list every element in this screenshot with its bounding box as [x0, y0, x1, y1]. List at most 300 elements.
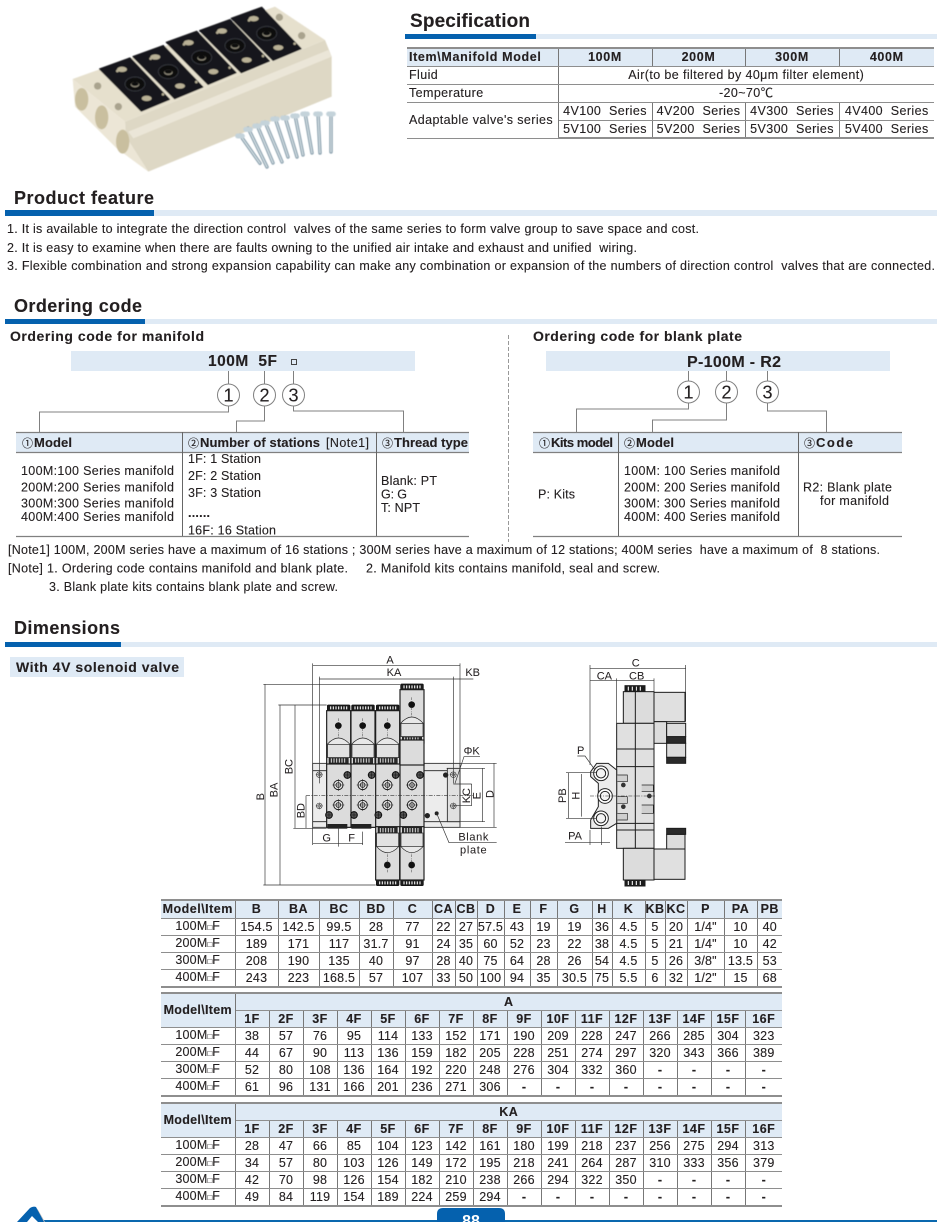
- table: dimensions by item: B: [252, 902, 261, 916]
- table: dimension KA by stations: 275: [683, 1138, 705, 1152]
- dimension lines: [263, 663, 497, 885]
- table: dimensions by item: 3/8": [694, 954, 717, 968]
- table: dimensions by item: 5: [651, 954, 659, 968]
- table: dimensions by item: 100: [480, 971, 501, 985]
- heading: Specification: [405, 11, 937, 39]
- table: blank plate code legend: Model: [636, 435, 674, 450]
- table: dimensions by item: 1/4": [694, 920, 717, 934]
- table: blank plate code legend: [533, 432, 902, 536]
- heading: Specification: Specification: [410, 11, 530, 32]
- table: dimension A by stations: 3F: [312, 1012, 328, 1026]
- table: dimension A by stations: 266: [649, 1028, 671, 1042]
- table: dimensions by item: G: [569, 902, 580, 916]
- table: blank plate code legend: 100M: 100 Series manifold: [624, 464, 780, 478]
- table: dimensions by item: 142.5: [282, 920, 315, 934]
- dimension labels: Blank: [458, 832, 489, 844]
- table: dimensions by item: C: [408, 902, 417, 916]
- table: dimension A by stations: 5F: [380, 1012, 396, 1026]
- table: dimension KA by stations: 28: [245, 1138, 259, 1152]
- table: dimension A by stations: 228: [581, 1028, 603, 1042]
- table: dimension A by stations: 271: [445, 1080, 467, 1094]
- table: dimensions by item: 15: [733, 971, 748, 985]
- table: dimension A by stations: 205: [479, 1046, 501, 1060]
- table: specification: 100M: [588, 50, 622, 64]
- table: dimension KA by stations: 5F: [380, 1122, 396, 1136]
- table: dimension A by stations: 182: [445, 1046, 467, 1060]
- table: dimension KA by stations: 84: [279, 1190, 293, 1204]
- text block: product features: 2. It is easy to examine when there are faults owning to the unified air intake and exhaust and unified wiring.: [7, 241, 637, 255]
- table: manifold code legend: [16, 432, 469, 538]
- table: dimension A by stations: 136: [343, 1062, 365, 1076]
- table: dimensions by item: 1/2": [694, 971, 717, 985]
- table: dimension A by stations: 366: [717, 1046, 739, 1060]
- table: specification: Adaptable valve's series: [409, 113, 553, 127]
- table: dimensions by item: 50: [459, 971, 473, 985]
- table: dimension KA by stations: -: [762, 1190, 766, 1204]
- table: specification: 5V100 Series: [563, 122, 647, 136]
- table: dimensions by item: 68: [763, 971, 777, 985]
- table: dimension KA by stations: 259: [445, 1190, 467, 1204]
- table: dimensions by item: 43: [510, 920, 524, 934]
- table: dimension KA by stations: 180: [513, 1138, 535, 1152]
- table: dimensions by item: 35: [536, 971, 551, 985]
- table: dimensions by item: H: [597, 902, 607, 916]
- table: dimension A by stations: 247: [615, 1028, 637, 1042]
- table: dimension KA by stations: 200M□F: [175, 1154, 220, 1168]
- table: dimension A by stations: 80: [279, 1062, 293, 1076]
- table: dimensions by item: 6: [651, 971, 659, 985]
- footer band with page number tab: [17, 1207, 937, 1222]
- table: dimension KA by stations: KA: [499, 1105, 518, 1119]
- table: dimensions by item: 5.5: [620, 971, 637, 985]
- table: dimension A by stations: -: [762, 1062, 766, 1076]
- table: dimension A by stations: 200M□F: [175, 1044, 220, 1058]
- table: dimension A by stations: 400M□F: [175, 1079, 220, 1093]
- heading: Product feature: [5, 188, 937, 216]
- table: dimensions by item: E: [513, 902, 521, 916]
- table: dimensions by item: 13.5: [728, 954, 753, 968]
- table: dimension KA by stations: 123: [411, 1138, 433, 1152]
- table: dimension KA by stations: 103: [343, 1156, 365, 1170]
- table: dimensions by item: F: [539, 902, 548, 916]
- dimension labels: PA: [568, 830, 583, 842]
- table: dimension A by stations: A: [504, 995, 514, 1009]
- table: dimensions by item: Model\Item: [163, 902, 233, 916]
- table: dimensions by item: 75: [483, 954, 498, 968]
- table: dimension KA by stations: 256: [649, 1138, 671, 1152]
- table: blank plate code legend: P: Kits: [538, 488, 575, 502]
- table: dimension KA by stations: 66: [313, 1138, 327, 1152]
- subheading: manifold: Ordering code for manifold: [10, 328, 204, 344]
- table: dimension A by stations: 360: [615, 1062, 637, 1076]
- dimension labels: C: [632, 658, 640, 670]
- table: dimension A by stations: 57: [279, 1028, 293, 1042]
- dimension lines: [565, 665, 686, 845]
- table: dimension A by stations: 7F: [448, 1012, 464, 1026]
- table: dimension KA by stations: 400M□F: [175, 1189, 220, 1203]
- table: dimensions by item: 24: [436, 936, 451, 950]
- table: blank plate code legend: 400M: 400 Series manifold: [624, 510, 780, 524]
- table: manifold code legend: Model: [34, 435, 72, 450]
- table: dimension A by stations: 171: [479, 1028, 501, 1042]
- table: dimension KA by stations: 15F: [716, 1122, 740, 1136]
- table: dimension A by stations: 131: [309, 1080, 331, 1094]
- table: dimension KA by stations: 294: [547, 1172, 569, 1186]
- table: dimension KA by stations: 149: [411, 1156, 433, 1170]
- table: manifold code legend: ②: [188, 437, 199, 450]
- table: dimension KA by stations: 172: [445, 1156, 467, 1170]
- table: dimension A by stations: 11F: [581, 1012, 603, 1026]
- table: dimension A by stations: 236: [411, 1080, 433, 1094]
- notes: [8, 543, 880, 594]
- dimension labels: ΦK: [464, 746, 480, 758]
- table: dimension A by stations: 251: [547, 1046, 569, 1060]
- divider between ordering panels: [508, 335, 510, 542]
- table: dimension A by stations: 300M□F: [175, 1062, 220, 1076]
- table: dimension KA by stations: 10F: [546, 1122, 570, 1136]
- table: dimensions by item: 75: [595, 971, 609, 985]
- table: dimension A by stations: 304: [717, 1028, 739, 1042]
- table: dimensions by item: KC: [666, 902, 686, 916]
- table: dimension A by stations: 332: [581, 1062, 603, 1076]
- table: specification: 4V300 Series: [750, 104, 834, 118]
- table: dimension A by stations: 304: [547, 1062, 569, 1076]
- table: dimension KA by stations: 85: [347, 1138, 361, 1152]
- notes: 3. Blank plate kits contains blank plate and screw.: [49, 580, 338, 594]
- table: manifold code legend: 200M:200 Series manifold: [21, 480, 174, 494]
- table: dimension A by stations: 6F: [414, 1012, 430, 1026]
- black gasket plates: [100, 7, 301, 111]
- table: manifold code legend: 16F: 16 Station: [188, 524, 276, 538]
- table: dimension KA by stations: -: [692, 1172, 696, 1186]
- table: dimension KA by stations: 238: [479, 1172, 501, 1186]
- table: dimension KA by stations: 199: [547, 1138, 569, 1152]
- code bar: 100M 5F: 100M 5F: [208, 353, 277, 370]
- dimension labels: KA: [387, 667, 402, 679]
- table: blank plate code legend: 200M: 200 Series manifold: [624, 480, 780, 494]
- table: dimensions by item: 32: [669, 971, 683, 985]
- table: dimension KA by stations: 294: [479, 1190, 501, 1204]
- table: specification: [407, 47, 934, 139]
- table: dimensions by item: 4.5: [620, 920, 637, 934]
- table: dimension KA by stations: 104: [377, 1138, 399, 1152]
- table: dimension KA by stations: 11F: [581, 1122, 603, 1136]
- table: dimensions by item: 40: [369, 954, 383, 968]
- table: dimension A by stations: 67: [279, 1046, 293, 1060]
- table: dimensions by item: 35: [459, 936, 473, 950]
- table: manifold code legend: 300M:300 Series manifold: [21, 496, 174, 510]
- text block: product features: 3. Flexible combination and strong expansion capability can make any combination or expansion of the numbers of direction control valves that are connected.: [7, 259, 935, 273]
- table: dimension A by stations: 10F: [546, 1012, 570, 1026]
- table: dimensions by item: CB: [456, 902, 476, 916]
- numbered callouts with connector lines: [576, 371, 826, 432]
- table: specification: 300M: [775, 50, 809, 64]
- table: dimensions by item: 223: [288, 971, 309, 985]
- dimension labels: [255, 654, 496, 856]
- table: dimensions by item: 100M□F: [175, 918, 220, 932]
- table: dimension KA by stations: 224: [411, 1190, 433, 1204]
- table: dimensions by item: 19: [536, 920, 551, 934]
- table: dimensions by item: 28: [436, 954, 451, 968]
- heading: Dimensions: Dimensions: [14, 618, 120, 638]
- table: dimension KA by stations: 16F: [752, 1122, 775, 1136]
- table: dimensions by item: 31.7: [363, 936, 389, 950]
- table: dimensions by item: 27: [459, 920, 473, 934]
- table: dimension A by stations: 209: [547, 1028, 569, 1042]
- table: dimension KA by stations: 356: [717, 1156, 739, 1170]
- table: dimension A by stations: 133: [411, 1028, 433, 1042]
- table: dimension KA by stations: 1F: [244, 1122, 260, 1136]
- table: dimension KA by stations: 210: [445, 1172, 467, 1186]
- table: dimensions by item: 22: [567, 936, 582, 950]
- table: dimension KA by stations: 98: [313, 1172, 327, 1186]
- table: dimensions by item: 200M□F: [175, 936, 220, 950]
- code bar: 100M 5F: [71, 351, 415, 371]
- product photo: manifold block with screws: [73, 7, 333, 172]
- table: blank plate code legend: Kits model: [551, 435, 613, 450]
- numbered callouts with connector lines: 2: [721, 382, 732, 402]
- table: dimension A by stations: -: [658, 1062, 662, 1076]
- table: dimension A by stations: 285: [683, 1028, 705, 1042]
- table: manifold code legend: T: NPT: [381, 501, 420, 515]
- table: dimension KA by stations: 310: [649, 1156, 671, 1170]
- table: dimension A by stations: 113: [344, 1046, 364, 1060]
- table: manifold code legend: [Note1]: [326, 436, 369, 450]
- table: dimensions by item: 52: [510, 936, 524, 950]
- dimension labels: F: [348, 832, 355, 844]
- numbered callouts with connector lines: 3: [762, 382, 773, 402]
- table: dimensions by item: 189: [246, 936, 267, 950]
- table: dimension KA by stations: 126: [343, 1172, 365, 1186]
- table: dimensions by item: BA: [289, 902, 308, 916]
- table: dimensions by item: K: [624, 902, 633, 916]
- table: dimension A by stations: 389: [753, 1046, 774, 1060]
- code bar: P-100M-R2: [546, 351, 890, 371]
- dimension labels: KC: [461, 788, 473, 803]
- table: dimension KA by stations: 237: [615, 1138, 637, 1152]
- table: dimension KA by stations: 189: [377, 1190, 399, 1204]
- table: dimension A by stations: -: [624, 1080, 628, 1094]
- table: dimensions by item: 243: [246, 971, 267, 985]
- table: dimensions by item: 300M□F: [175, 952, 220, 966]
- table: dimension A by stations: 1F: [244, 1012, 260, 1026]
- table: dimensions by item: P: [701, 902, 710, 916]
- table: dimension A by stations: 159: [411, 1046, 433, 1060]
- table: dimension KA by stations: 57: [279, 1156, 293, 1170]
- table: dimensions by item: 99.5: [326, 920, 352, 934]
- table: dimension KA by stations: 80: [313, 1156, 327, 1170]
- table: dimensions by item: 54: [595, 954, 609, 968]
- table: dimensions by item: 38: [595, 936, 609, 950]
- table: blank plate code legend: R2: Blank plate: [803, 480, 892, 494]
- table: dimensions by item: 28: [369, 920, 383, 934]
- table: dimensions by item: 33: [436, 971, 451, 985]
- table: dimensions by item: 97: [405, 954, 420, 968]
- table: dimension A by stations: 16F: [752, 1012, 775, 1026]
- table: specification: Fluid: [409, 68, 438, 82]
- numbered callouts with connector lines: 2: [259, 386, 270, 406]
- manifold ports: [590, 763, 655, 828]
- table: manifold code legend: 3F: 3 Station: [188, 486, 261, 500]
- table: dimension KA by stations: -: [726, 1190, 730, 1204]
- table: blank plate code legend: ②: [624, 437, 635, 450]
- table: dimensions by item: D: [486, 902, 495, 916]
- table: dimension A by stations: [161, 992, 782, 1097]
- table: dimensions by item: 10: [733, 920, 748, 934]
- table: dimension KA by stations: 300M□F: [175, 1172, 220, 1186]
- table: dimensions by item: 10: [733, 936, 748, 950]
- table: dimensions by item: CA: [434, 902, 453, 916]
- table: dimension KA by stations: 70: [279, 1172, 293, 1186]
- table: dimensions by item: 22: [436, 920, 451, 934]
- table: dimensions by item: 190: [288, 954, 309, 968]
- table: dimension KA by stations: -: [658, 1190, 662, 1204]
- table: dimension A by stations: -: [692, 1080, 696, 1094]
- table: dimension A by stations: 306: [479, 1080, 501, 1094]
- table: dimension KA by stations: -: [556, 1190, 560, 1204]
- text block: product features: 1. It is available to integrate the direction control valves of the same series to form valve group to save space and cost.: [7, 222, 699, 236]
- table: dimensions by item: 20: [669, 920, 683, 934]
- table: dimension A by stations: -: [556, 1080, 560, 1094]
- table: manifold code legend: ③: [382, 437, 393, 450]
- table: dimensions by item: 94: [510, 971, 524, 985]
- table: dimension KA by stations: -: [522, 1190, 526, 1204]
- table: dimensions by item: PA: [732, 902, 749, 916]
- table: dimensions by item: 64: [510, 954, 524, 968]
- table: dimension KA by stations: -: [624, 1190, 628, 1204]
- table: manifold code legend: 100M:100 Series manifold: [21, 464, 174, 478]
- dimension labels: [557, 658, 644, 842]
- table: dimension KA by stations: 266: [513, 1172, 535, 1186]
- table: specification: Temperature: [409, 86, 484, 100]
- table: dimension A by stations: 220: [445, 1062, 467, 1076]
- table: manifold code legend: 400M:400 Series manifold: [21, 510, 174, 524]
- table: dimension A by stations: 90: [313, 1046, 327, 1060]
- heading: Dimensions: [5, 618, 937, 647]
- table: dimension A by stations: 12F: [614, 1012, 638, 1026]
- table: dimension A by stations: 38: [245, 1028, 259, 1042]
- table: dimension A by stations: -: [522, 1080, 526, 1094]
- table: dimension KA by stations: 47: [279, 1138, 293, 1152]
- table: dimension KA by stations: 313: [753, 1138, 775, 1152]
- table: dimension A by stations: 320: [649, 1046, 671, 1060]
- table: dimensions by item: 40: [459, 954, 473, 968]
- table: specification: 5V400 Series: [845, 122, 929, 136]
- table: dimensions by item: 57.5: [478, 920, 503, 934]
- table: dimension KA by stations: 218: [513, 1156, 535, 1170]
- dimension labels: BD: [295, 803, 307, 818]
- label: With 4V solenoid valve: With 4V solenoid valve: [16, 659, 179, 675]
- drawing: side view with dimensions: [557, 658, 686, 886]
- table: dimensions by item: [161, 899, 782, 988]
- table: manifold code legend: Thread type: [394, 435, 468, 450]
- table: dimension A by stations: 192: [411, 1062, 433, 1076]
- table: dimensions by item: 107: [402, 971, 423, 985]
- table: dimension KA by stations: 182: [411, 1172, 433, 1186]
- table: dimension A by stations: 248: [479, 1062, 501, 1076]
- table: dimensions by item: 168.5: [323, 971, 355, 985]
- table: dimension A by stations: -: [726, 1062, 730, 1076]
- subheading: blank plate: Ordering code for blank plate: [533, 328, 742, 344]
- table: dimension KA by stations: 9F: [516, 1122, 532, 1136]
- table: dimension A by stations: 166: [343, 1080, 365, 1094]
- table: dimensions by item: 57: [369, 971, 383, 985]
- table: specification: 400M: [870, 50, 904, 64]
- heading: Ordering code: [5, 296, 937, 324]
- table: dimensions by item: 5: [651, 936, 659, 950]
- table: dimension KA by stations: Model\Item: [164, 1113, 232, 1127]
- table: dimension KA by stations: 350: [615, 1172, 637, 1186]
- table: dimension A by stations: -: [590, 1080, 594, 1094]
- table: dimension A by stations: -: [762, 1080, 766, 1094]
- table: dimension KA by stations: 14F: [682, 1122, 706, 1136]
- table: specification: 5V300 Series: [750, 122, 834, 136]
- table: dimension KA by stations: 42: [245, 1172, 259, 1186]
- dimension labels: BC: [284, 759, 296, 774]
- table: dimension A by stations: 44: [245, 1046, 259, 1060]
- dimension labels: plate: [460, 844, 487, 856]
- table: dimension A by stations: 274: [581, 1046, 603, 1060]
- table: dimension A by stations: 4F: [346, 1012, 362, 1026]
- dimension labels: D: [484, 790, 496, 798]
- table: dimensions by item: 1/4": [694, 936, 717, 950]
- table: specification: -20~70℃: [719, 86, 774, 100]
- solenoid valves: [316, 684, 457, 886]
- table: manifold code legend: G: G: [381, 488, 407, 502]
- table: dimension A by stations: Model\Item: [164, 1003, 232, 1017]
- table: dimension KA by stations: 154: [377, 1172, 399, 1186]
- table: dimensions by item: BD: [366, 902, 386, 916]
- table: dimension KA by stations: -: [762, 1172, 766, 1186]
- table: dimension KA by stations: 13F: [648, 1122, 672, 1136]
- table: dimension A by stations: 2F: [278, 1012, 294, 1026]
- table: dimension A by stations: 136: [377, 1046, 399, 1060]
- dimension labels: E: [472, 792, 484, 799]
- table: dimensions by item: 28: [536, 954, 551, 968]
- table: dimension A by stations: 201: [377, 1080, 399, 1094]
- manifold body: [73, 7, 332, 172]
- table: dimension KA by stations: 3F: [312, 1122, 328, 1136]
- screws: [238, 113, 333, 167]
- table: specification: 4V100 Series: [563, 104, 647, 118]
- table: dimension KA by stations: 218: [581, 1138, 603, 1152]
- table: dimension KA by stations: 100M□F: [175, 1138, 220, 1152]
- dimension labels: KB: [465, 667, 480, 679]
- dimension labels: PB: [557, 788, 569, 803]
- table: dimension KA by stations: 322: [581, 1172, 603, 1186]
- heading: Ordering code: Ordering code: [14, 296, 142, 316]
- table: dimension KA by stations: 241: [547, 1156, 569, 1170]
- table: dimension KA by stations: 264: [581, 1156, 603, 1170]
- table: dimensions by item: 26: [669, 954, 683, 968]
- table: dimension KA by stations: 333: [683, 1156, 705, 1170]
- dimension labels: H: [570, 792, 582, 800]
- panel: ordering code for blank plate: [533, 328, 902, 536]
- table: dimensions by item: 117: [329, 936, 349, 950]
- table: dimensions by item: 53: [763, 954, 777, 968]
- table: dimension A by stations: 100M□F: [175, 1028, 220, 1042]
- table: dimension A by stations: 15F: [716, 1012, 740, 1026]
- dimension labels: CB: [629, 670, 644, 682]
- table: specification: 5V200 Series: [657, 122, 740, 136]
- table: dimension KA by stations: -: [692, 1190, 696, 1204]
- table: dimensions by item: 5: [651, 920, 659, 934]
- table: dimension KA by stations: -: [726, 1172, 730, 1186]
- table: dimension KA by stations: 8F: [482, 1122, 498, 1136]
- table: specification: 4V200 Series: [657, 104, 740, 118]
- drawing: top view with dimensions: [255, 654, 497, 886]
- text block: product features: [7, 222, 935, 273]
